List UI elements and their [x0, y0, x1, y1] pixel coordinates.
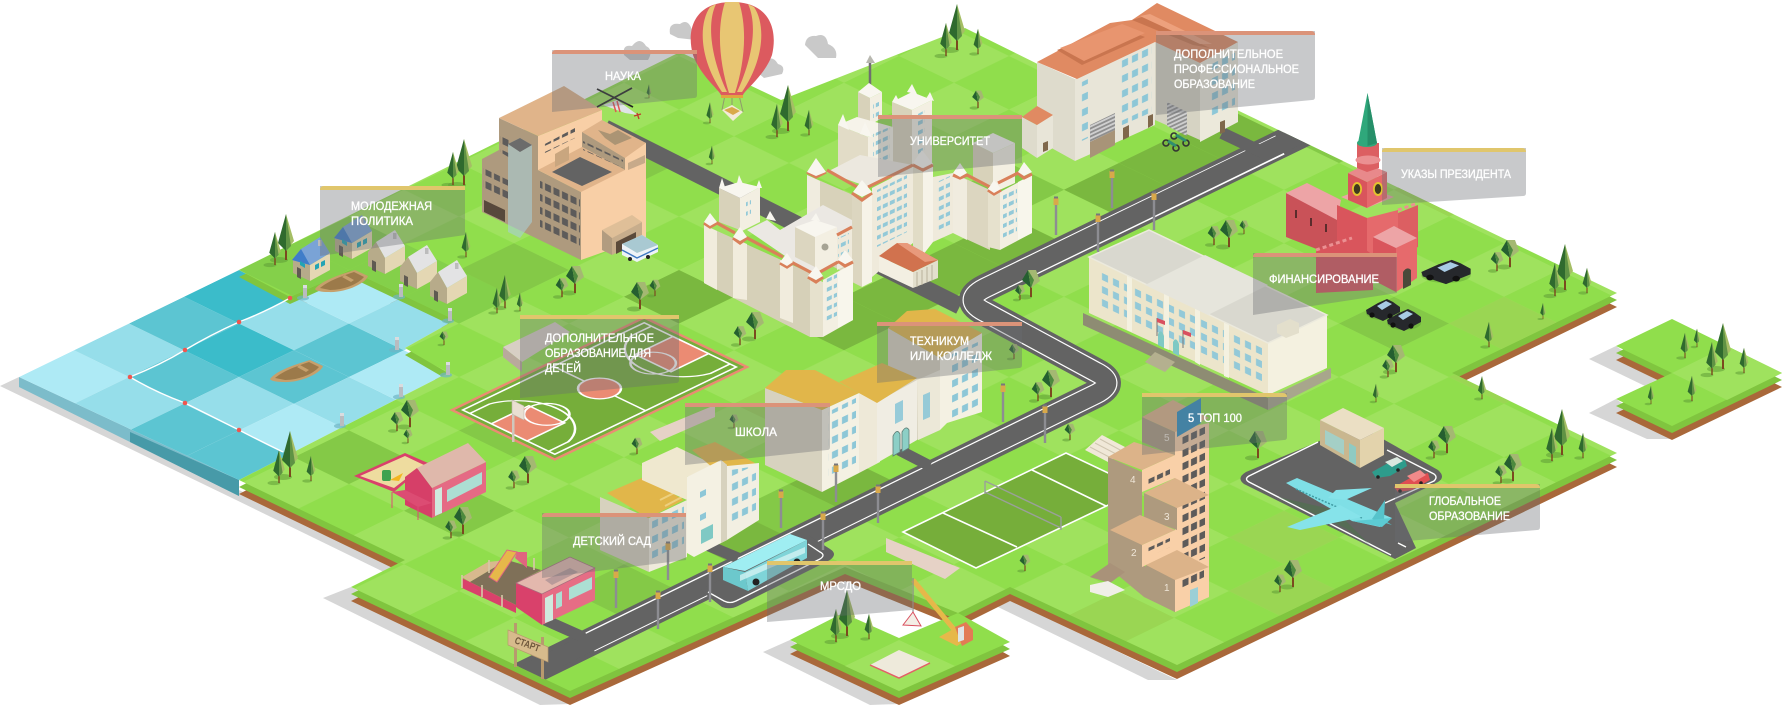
callout: Дополнительное образование для детей: ДЕТЕЙ: [545, 362, 581, 375]
start sign: СТАРТ: [513, 635, 541, 655]
callout: Техникум или колледж: [877, 322, 1022, 383]
callout: Техникум или колледж: ИЛИ КОЛЛЕДЖ: [910, 351, 992, 363]
small annex with orange roof: [1022, 106, 1053, 158]
callout: Дополнительное профессиональное образование: ПРОФЕССИОНАЛЬНОЕ: [1174, 64, 1299, 76]
kindergarten building (детский сад): [600, 442, 759, 572]
sand pit playground: [354, 453, 428, 492]
bleachers and benches: [503, 322, 1125, 579]
main island: checker grass surface: [239, 28, 1617, 691]
airport apron and runway: [1240, 425, 1442, 559]
science building: [482, 86, 646, 260]
callout: Дополнительное образование для детей: [520, 315, 679, 398]
black cars: [1366, 299, 1421, 331]
motorcycles: [1163, 133, 1189, 151]
floor-numbered tower (5 top 100): [1090, 398, 1209, 612]
river buoy rope: [128, 296, 292, 452]
callout: Наука: НАУКА: [605, 71, 641, 83]
callout: Глобальное образование: ОБРАЗОВАНИЕ: [1429, 511, 1510, 523]
darker grass tiles: [240, 114, 1556, 641]
callout: Дополнительное образование для детей: ОБРАЗОВАНИЕ ДЛЯ: [545, 348, 651, 360]
hot air balloon: [691, 2, 774, 121]
floor-numbered tower (5 top 100): 5: [1164, 433, 1170, 444]
callout: Наука: [552, 50, 697, 112]
mooring posts: [297, 284, 454, 428]
teal car: [1372, 457, 1407, 479]
callout: Глобальное образование: ГЛОБАЛЬНОЕ: [1429, 496, 1501, 508]
callout: 5 топ 100: [1142, 393, 1287, 455]
houses on the shore: [292, 215, 467, 304]
start sign: [508, 623, 548, 679]
volleyball court: [903, 453, 1142, 568]
callout: Указы президента: УКАЗЫ ПРЕЗИДЕНТА: [1401, 169, 1511, 181]
callout: Финансирование: ФИНАНСИРОВАНИЕ: [1269, 274, 1379, 286]
callout: Молодежная политика: МОЛОДЕЖНАЯ: [351, 201, 432, 213]
crane: [903, 578, 973, 646]
university left wing: [704, 175, 853, 337]
right L-shaped island: [1616, 319, 1782, 440]
road: straight science road: [605, 128, 960, 306]
callout: Школа: ШКОЛА: [735, 427, 777, 439]
callout: 5 топ 100: 5 ТОП 100: [1188, 413, 1242, 425]
road: main route with edge lines: [515, 125, 1320, 679]
callout: Техникум или колледж: ТЕХНИКУМ: [910, 336, 969, 348]
university main building: [807, 55, 1032, 287]
black limousine: [1421, 260, 1471, 284]
ambulance van: [622, 235, 658, 262]
basketball court: [452, 318, 747, 459]
street lamps: [614, 170, 1156, 629]
trees on the crane island: [824, 590, 873, 644]
college building (техникум): [765, 309, 982, 492]
basketball hoop: [512, 400, 524, 442]
callout: Дополнительное профессиональное образование: ДОПОЛНИТЕЛЬНОЕ: [1174, 49, 1283, 61]
callout: Молодежная политика: ПОЛИТИКА: [351, 216, 413, 228]
main island: grass edge band: [239, 35, 1617, 698]
helicopter: [597, 88, 641, 119]
callout: Финансирование: [1253, 253, 1397, 315]
callout: Детский сад: ДЕТСКИЙ САД: [573, 535, 651, 548]
callout: Школа: [685, 403, 830, 465]
crane island: [790, 613, 1010, 705]
large government building: [1083, 230, 1331, 410]
callout: Дополнительное образование для детей: ДОПОЛНИТЕЛЬНОЕ: [545, 333, 654, 345]
floor-numbered tower (5 top 100): 1: [1164, 583, 1170, 594]
callout: Указы президента: [1382, 148, 1526, 205]
kindergarten pink building: [516, 557, 595, 625]
airplane: [1278, 478, 1392, 545]
additional professional education building: [1037, 3, 1238, 161]
clouds: [624, 22, 836, 78]
floor-numbered tower (5 top 100): 2: [1131, 548, 1137, 559]
callout: Молодежная политика: [320, 186, 465, 256]
boats: [270, 270, 368, 382]
main island base: soil edge: [239, 42, 1617, 705]
callout: Глобальное образование: [1395, 484, 1540, 542]
floor-numbered tower (5 top 100): 3: [1164, 512, 1170, 523]
road: building access stubs: [545, 133, 1262, 636]
floor-numbered tower (5 top 100): 4: [1130, 475, 1136, 486]
red car: [1394, 470, 1430, 493]
bus stop bay: [700, 535, 834, 608]
trees: [263, 4, 1591, 594]
trees on the right island: [1645, 323, 1748, 405]
callout: Дополнительное профессиональное образование: [1156, 31, 1315, 115]
callout: Университет: [878, 115, 1022, 177]
callout: Детский сад: [542, 513, 686, 578]
university entrance portico: [879, 243, 938, 288]
kiosk at airport: [1320, 408, 1384, 468]
pink pavilion: [392, 443, 486, 520]
callout: Дополнительное профессиональное образование: ОБРАЗОВАНИЕ: [1174, 79, 1255, 91]
water: checker tiles of the river: [19, 270, 448, 496]
callout: Университет: УНИВЕРСИТЕТ: [910, 136, 990, 148]
kremlin tower and walls: [1286, 93, 1418, 293]
kindergarten playground and slide: [462, 550, 541, 613]
ground drop shadows: [0, 346, 1672, 705]
callout: МРСДО: МРСДО: [820, 581, 861, 593]
callout: МРСДО: [767, 561, 912, 622]
bus: [723, 534, 807, 591]
